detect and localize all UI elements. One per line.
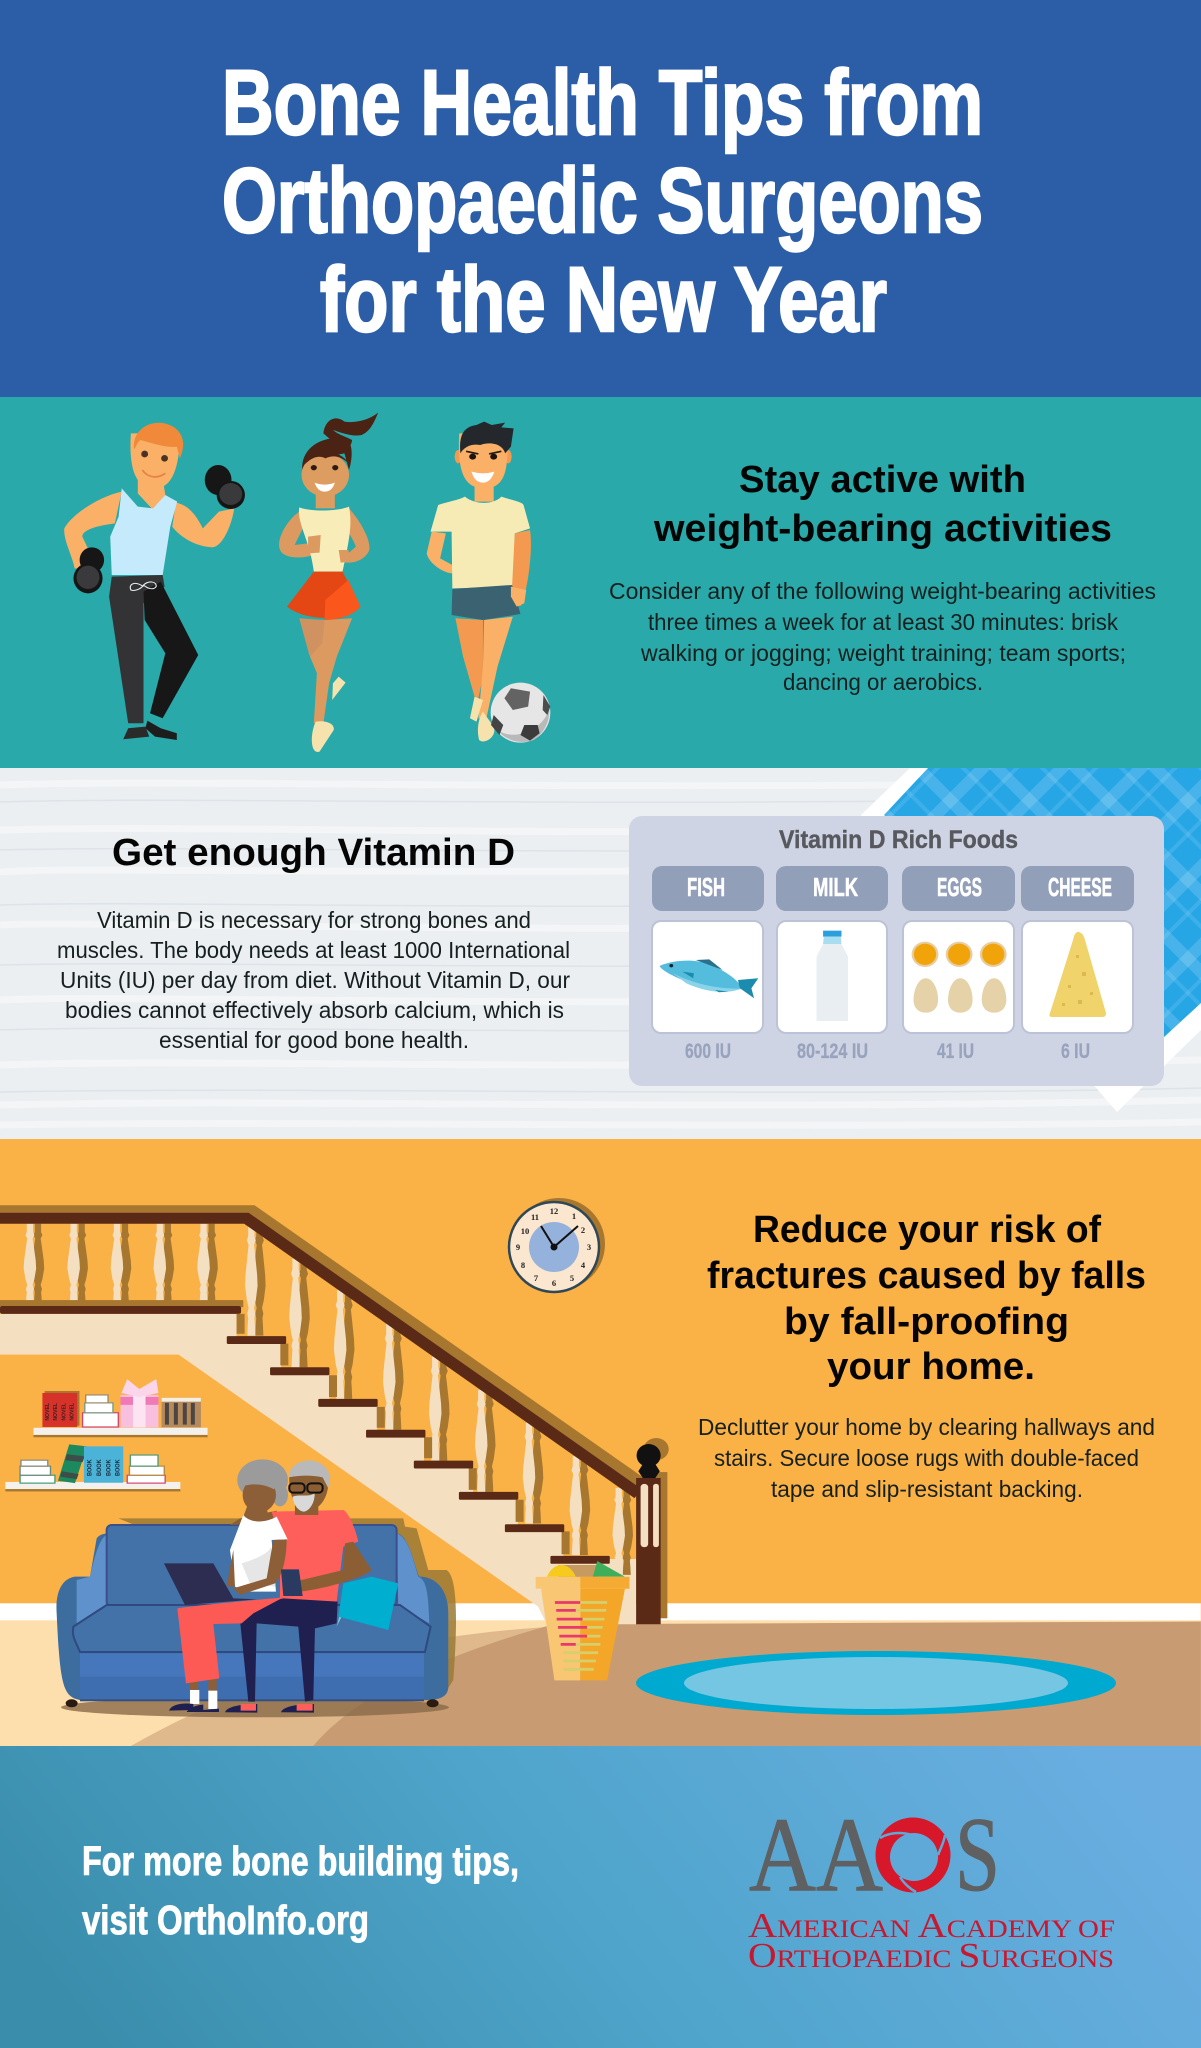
heading: fall-proof: fractures caused by falls xyxy=(707,1255,1146,1297)
icon: logo ring xyxy=(876,1818,950,1892)
title xyxy=(222,52,983,351)
title: for the New Year xyxy=(320,249,887,351)
title: Bone Health Tips from xyxy=(222,52,983,154)
clock: 12 xyxy=(550,1206,558,1216)
logo: AAOS: AMERICAN ACADEMY OF xyxy=(748,1906,1115,1945)
illustration: couple on couch xyxy=(56,1459,456,1717)
text: fall-proof body: stairs. Secure loose rugs with double-faced xyxy=(714,1445,1139,1471)
text: stay active body: three times a week for at least 30 minutes: brisk xyxy=(648,609,1118,635)
laundry basket xyxy=(536,1561,629,1680)
clock: 6 xyxy=(552,1278,556,1288)
values: vitamin D per food: 600 IU xyxy=(685,1040,731,1063)
text: call to action xyxy=(82,1838,519,1943)
heading: fall-proof: your home. xyxy=(827,1346,1035,1388)
panel: vitamin D rich foods xyxy=(629,816,1164,1086)
heading: stay active: weight-bearing activities xyxy=(653,508,1112,550)
text: vitamin D body: essential for good bone health. xyxy=(159,1027,469,1053)
figure: man with dumbbells xyxy=(64,423,245,740)
heading: fall-proof xyxy=(707,1209,1146,1388)
clock: 3 xyxy=(587,1242,591,1252)
text: vitamin D body: bodies cannot effectively absorb calcium, which is xyxy=(65,997,564,1023)
clock: 2 xyxy=(581,1225,585,1235)
shelf with books and gift: NOVEL xyxy=(45,1402,51,1421)
illustration: staircase and floor xyxy=(0,1211,1201,1747)
heading: fall-proof: by fall-proofing xyxy=(784,1301,1069,1343)
logo: AAOS: S xyxy=(955,1796,1000,1913)
text: vitamin D body: muscles. The body needs at least 1000 International xyxy=(57,937,570,963)
clock: 9 xyxy=(516,1242,520,1252)
column: milk: MILK xyxy=(813,872,858,902)
heading: vitamin D: Get enough Vitamin D xyxy=(112,832,515,874)
figure: man with soccer ball xyxy=(427,422,550,743)
values: vitamin D per food: 6 IU xyxy=(1061,1040,1090,1063)
clock: 10 xyxy=(521,1226,529,1236)
heading: foods: Vitamin D Rich Foods xyxy=(779,826,1018,854)
shelf with books and gift: NOVEL xyxy=(53,1402,59,1421)
values: vitamin D per food: 41 IU xyxy=(937,1040,974,1063)
couch xyxy=(56,1525,448,1707)
text: vitamin D body: Units (IU) per day from diet. Without Vitamin D, our xyxy=(60,967,570,993)
handrail xyxy=(0,1211,647,1494)
logo: AAOS xyxy=(748,1796,1115,1975)
laptop xyxy=(164,1563,257,1605)
column: milk xyxy=(776,866,888,1033)
heading: stay active xyxy=(653,459,1112,550)
shelf with books and gift xyxy=(33,1379,208,1437)
logo: AAOS: ORTHOPAEDIC SURGEONS xyxy=(748,1936,1114,1975)
clock xyxy=(509,1198,605,1292)
clock: 11 xyxy=(531,1212,539,1222)
column: eggs xyxy=(902,866,1015,1033)
shelf with books: BOOK xyxy=(115,1459,122,1476)
pillow xyxy=(337,1577,398,1630)
clock: 4 xyxy=(581,1260,586,1270)
heading: stay active: Stay active with xyxy=(739,459,1026,501)
clock: 8 xyxy=(521,1260,525,1270)
text: fall-proof body xyxy=(698,1414,1155,1502)
values: vitamin D per food xyxy=(685,1040,1090,1063)
shelf with books: BOOK xyxy=(87,1459,94,1476)
column: eggs: EGGS xyxy=(937,872,982,902)
text: stay active body: walking or jogging; weight training; team sports; xyxy=(640,640,1126,666)
column: fish xyxy=(652,866,764,1033)
text: vitamin D body xyxy=(57,907,570,1053)
logo: AAOS: AA xyxy=(749,1796,883,1913)
phone xyxy=(281,1569,303,1596)
shelf with books: BOOK xyxy=(97,1459,103,1476)
decoration: blue plaid cloth xyxy=(861,768,1201,1112)
icon: cheese wedge xyxy=(1049,932,1106,1017)
shelf with books and gift: NOVEL xyxy=(61,1402,68,1421)
heading: fall-proof: Reduce your risk of xyxy=(753,1209,1101,1251)
icon: eggs xyxy=(912,942,1007,1013)
figure: older man xyxy=(225,1460,372,1713)
clock: 7 xyxy=(534,1273,539,1283)
text: fall-proof body: Declutter your home by clearing hallways and xyxy=(698,1414,1155,1440)
figure: older woman xyxy=(169,1459,288,1712)
column: fish: FISH xyxy=(687,872,725,902)
newel post xyxy=(636,1438,669,1624)
clock: 5 xyxy=(570,1273,574,1283)
panel: footer xyxy=(0,1746,1201,2048)
text: fall-proof body: tape and slip-resistant backing. xyxy=(771,1476,1083,1502)
panel: fall-proof home xyxy=(0,1139,1201,1747)
text: call to action: For more bone building tips, xyxy=(82,1838,519,1884)
text: call to action: visit OrthoInfo.org xyxy=(82,1897,369,1943)
text: stay active body xyxy=(609,578,1156,695)
text: stay active body: dancing or aerobics. xyxy=(783,669,983,695)
clock: 1 xyxy=(572,1211,576,1221)
text: vitamin D body: Vitamin D is necessary for strong bones and xyxy=(97,907,531,933)
column: cheese: CHEESE xyxy=(1048,872,1112,902)
group: stair treads xyxy=(0,1300,610,1564)
panel: stay active xyxy=(0,397,1201,768)
panel: header xyxy=(0,0,1201,397)
illustration: three active people xyxy=(64,413,550,752)
rug xyxy=(636,1651,1116,1715)
values: vitamin D per food: 80-124 IU xyxy=(797,1040,868,1063)
shelf with books xyxy=(5,1444,180,1491)
icon: fish xyxy=(659,959,758,998)
group: balusters xyxy=(24,1224,633,1575)
text: stay active body: Consider any of the following weight-bearing activities xyxy=(609,578,1156,604)
shelf with books and gift: NOVEL xyxy=(69,1402,76,1421)
title: Orthopaedic Surgeons xyxy=(222,150,983,252)
icon: milk bottle xyxy=(817,931,848,1021)
figure: woman running xyxy=(279,413,378,752)
column: cheese xyxy=(1021,866,1134,1033)
panel: vitamin D xyxy=(0,768,1201,1139)
shelf with books: BOOK xyxy=(106,1459,112,1476)
